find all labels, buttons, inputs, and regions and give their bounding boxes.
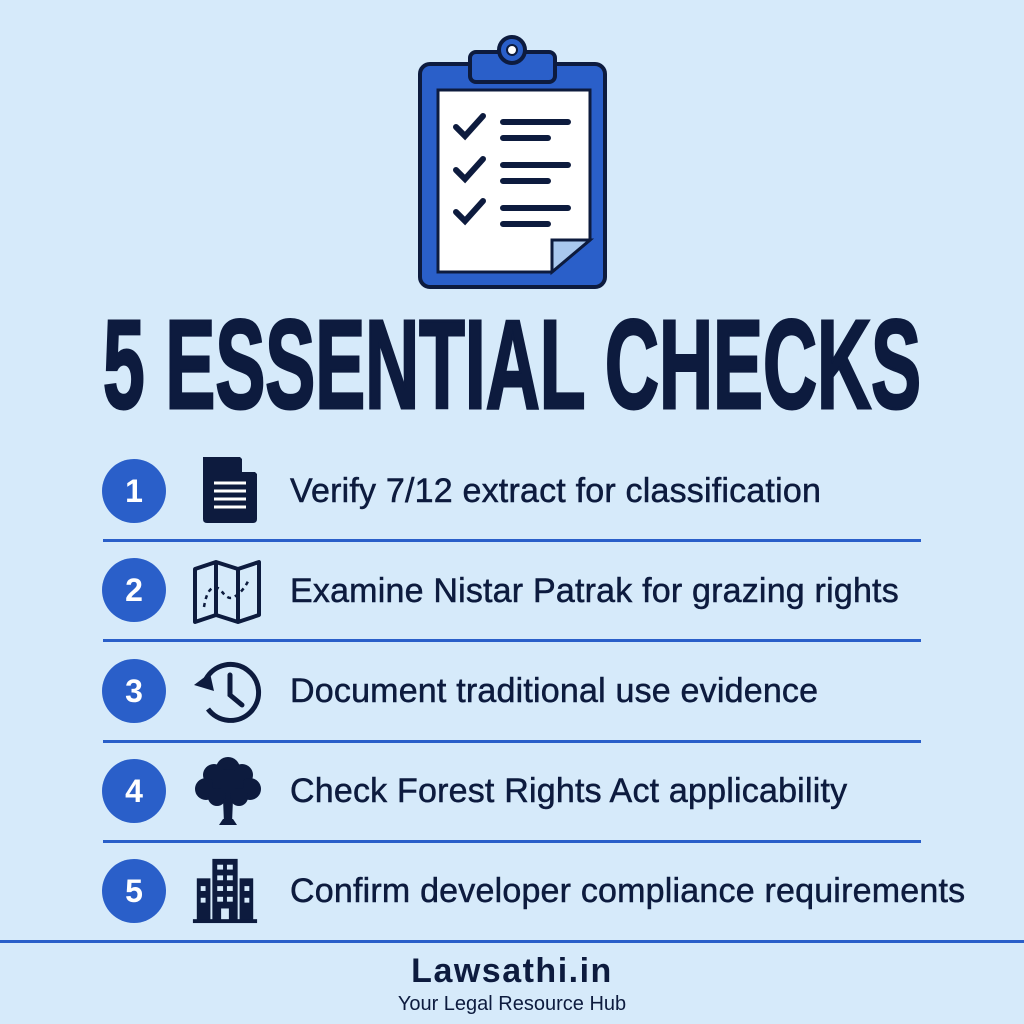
number 5: 5	[125, 873, 143, 909]
number 1: 1	[125, 473, 143, 509]
number 2	[102, 558, 166, 622]
item 2	[102, 558, 899, 624]
text 2: Examine Nistar Patrak for grazing rights	[290, 572, 899, 610]
item 4	[102, 757, 848, 825]
tagline: Your Legal Resource Hub	[398, 993, 626, 1015]
text 5: Confirm developer compliance requirements	[290, 872, 965, 910]
text 3: Document traditional use evidence	[290, 672, 818, 710]
number 5	[102, 859, 166, 923]
text 4: Check Forest Rights Act applicability	[290, 772, 847, 810]
number 3: 3	[125, 673, 143, 709]
number 1	[102, 459, 166, 523]
icon: clipboard	[418, 35, 607, 289]
icon: tree	[195, 757, 261, 825]
icon: map	[193, 560, 261, 624]
number 4	[102, 759, 166, 823]
item 1	[102, 457, 821, 523]
text 1: Verify 7/12 extract for classification	[290, 472, 821, 510]
number 2: 2	[125, 572, 143, 608]
number 4: 4	[125, 773, 143, 809]
number 3	[102, 659, 166, 723]
brand: Lawsathi.in	[411, 952, 613, 990]
footer	[398, 952, 626, 1015]
icon: building	[192, 858, 258, 924]
icon: history clock	[194, 662, 262, 723]
item 5	[102, 858, 965, 924]
item 3	[102, 659, 818, 723]
icon: document	[203, 457, 257, 523]
